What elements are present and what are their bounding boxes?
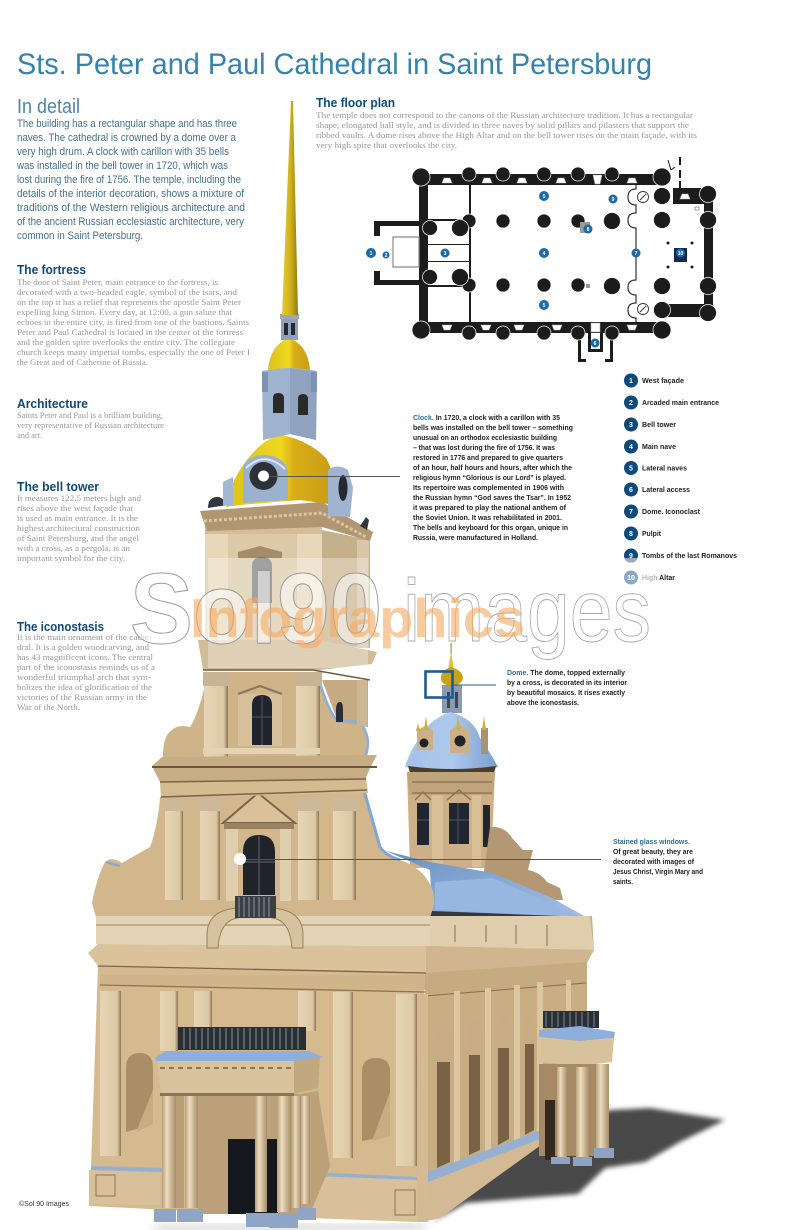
plan numbers: 4 [543,251,546,257]
watermark: Infographics [190,587,525,649]
text block: architecture: and art. [17,430,42,440]
title: Sts. Peter and Paul Cathedral in Saint Petersburg [17,48,652,81]
callout: clock: – that was lost during the fire of 1756. It was [413,443,555,452]
watermark haze over the tower [208,558,368,668]
text block: the bell tower: highest architectural construction [17,523,141,533]
text block: in detail: The building has a rectangular shape and has three [17,118,237,130]
text block: the floor plan: The temple does not correspond to the canons of the Russian architecture tradition. It has a rectangular [316,110,693,120]
callout: clock [413,413,573,542]
mid tier [152,672,377,798]
text block: the fortress: expelling king Simon. Every day, at 12:00, a gun salute that [17,307,233,317]
text block: the iconostasis: wonderful triumphal arch that sym- [17,672,151,682]
front lower wall [89,966,425,1222]
callout: stained glass windows [613,837,703,886]
side wall [423,916,594,1222]
callout: clock: restored in 1776 and prepared to give quarters [413,453,563,462]
callout: clock: religious hymn “Glorious is our Lord” is played. [413,473,566,482]
text block: architecture [17,397,164,440]
legend: Lateral access [642,485,690,494]
text block: in detail: traditions of the Western religious architecture and [17,202,245,214]
plan numbers: 2 [385,253,388,259]
text block: in detail: details of the interior decoration, shows a mixture of [17,188,244,200]
text block: the fortress: on the top it has a relief that represents the apostle Saint Peter [17,297,241,307]
plan numbers [366,191,685,348]
legend: Main nave [642,442,676,451]
eagles [208,489,369,530]
callout: dome: by a cross, is decorated in its interior [507,678,627,687]
side wall pilasters and windows [417,980,571,1222]
text block: the bell tower: important symbol for the city. [17,553,125,563]
callout: stained glass windows: Jesus Christ, Virgin Mary and [613,867,703,876]
text block: the fortress: and the golden spire overlooks the entire city. The collegiate [17,337,235,347]
watermark: images [403,561,651,660]
text block: the bell tower: is used as main entrance. It is the [17,513,138,523]
text block: the floor plan: ribbed vaults. A dome rises above the High Altar and on the bell tower rises on the main façade, with its [316,130,698,140]
callout: clock: Clock. In 1720, a clock with a carillon with 35 [413,413,560,422]
legend: 3 [629,422,633,429]
plan numbers: 9 [612,197,615,203]
text block: the iconostasis [17,620,155,712]
callout: stained glass windows: decorated with images of [613,857,694,866]
text block: in detail: common in Saint Petersburg. [17,230,143,242]
plan numbers: 6 [594,341,597,347]
lower tier volutes [92,790,434,917]
callout: stained glass windows: Of great beauty, they are [613,847,693,856]
front pilasters and niches [100,991,417,1166]
text block: architecture: very representative of Russian architecture [17,420,164,430]
text block: the fortress: Peter and Paul Cathedral is located in the center of the fortress [17,327,244,337]
text block: the fortress: the Great and of Catherine of Russia. [17,357,148,367]
callout: dome: above the iconostasis. [507,698,579,707]
nave roof [386,851,586,917]
callout: dome: by beautiful mosaics. It rises exactly [507,688,626,697]
legend: 4 [629,444,633,451]
callout: clock: The bells and keyboard for this organ, unique in [413,523,568,532]
text block: the floor plan: very high spire that overlooks the city. [316,140,457,150]
text block: the floor plan: The floor plan [316,96,395,110]
text block: the bell tower: rises above the west façade that [17,503,134,513]
callout: clock: Its repertoire was complemented in 1906 with [413,483,564,492]
legend: 7 [629,509,633,516]
legend [624,374,737,584]
callout: clock: the Soviet Union. It was rehabilitated in 2001. [413,513,562,522]
lower tier pilasters [164,797,357,900]
callout: clock: unusual on an orthodox ecclesiastic building [413,433,557,442]
callout: dome: Dome. The dome, topped externally [507,668,626,677]
plan numbers: 8 [587,227,590,233]
tombs and pulpit [638,192,648,202]
watermark: Sol90 [130,553,382,665]
copyright: ©Sol 90 Images [19,1200,69,1208]
cathedral illustration [88,101,615,1228]
text block: the iconostasis: part of the iconostasis reminds us of a [17,662,155,672]
text block: the fortress: The door of Saint Peter, main entrance to the fortress, is [17,277,219,287]
text block: the bell tower: The bell tower [17,480,99,494]
upper tier [198,502,377,680]
text block: the fortress: church keeps many imperial tombs, especially the one of Peter I [17,347,250,357]
legend: 8 [629,531,633,538]
text block: the iconostasis: has 43 magnificent icons. The central [17,652,154,662]
legend: Lateral naves [642,464,687,472]
text block: in detail: lost during the fire of 1756. The temple, including the [17,174,241,186]
text block: the fortress: echoes in the entire city, is fired from one of the bastions. Saints [17,317,250,327]
ground shadow [150,1108,725,1230]
text block: the bell tower: with a cross, as a pergola, is an [17,543,131,553]
plan numbers: 5 [543,303,546,309]
lantern drum [262,314,317,440]
legend: Arcaded main entrance [642,398,719,407]
leader lines [234,470,601,865]
text block: the iconostasis: victories of the Russian army in the [17,692,147,702]
plan numbers: 1 [370,251,373,257]
text block: in detail: was installed in the bell tower in 1720, which was [16,160,228,172]
plinth [89,1166,417,1222]
main dome [223,435,353,517]
plan numbers: 10 [678,251,683,257]
legend: 5 [629,466,633,472]
legend: Dome. Iconoclast [642,507,701,516]
legend: 6 [629,487,633,494]
plan numbers: 5 [543,194,546,200]
text block: the fortress [17,263,250,367]
text block: the iconostasis: bolizes the idea of glorification of the [17,682,152,692]
text block: in detail: In detail [17,96,80,118]
side portico [539,1011,615,1166]
small dome tower [405,643,498,868]
front portico [154,1027,330,1228]
callout: stained glass windows: Stained glass windows. [613,837,690,846]
callout: dome [507,668,627,707]
callout: clock: Russia, were manufactured in Holland. [413,533,538,542]
callout: clock: of an hour, half hours and hours, after which the [413,463,572,472]
callout: stained glass windows: saints. [613,877,633,886]
text block: in detail: very high drum. A clock with carillon with 35 bells [17,146,229,158]
text block: the fortress: decorated with a two-headed eagle, symbol of the tsars, and [17,287,238,297]
text block: the iconostasis: War of the North. [17,702,80,712]
legend: Tombs of the last Romanovs [642,551,737,560]
text block: architecture: Saints Peter and Paul is a brilliant building, [17,410,163,420]
callout: clock: the Russian hymn “God saves the Tsar”. In 1952 [413,493,571,502]
legend: West façade [642,376,684,385]
text block: the bell tower [17,480,142,563]
text block: the bell tower: of Saint Petersburg, and the angel [17,533,140,543]
text block: in detail: of the ancient Russian ecclesiastic architecture, very [17,216,245,228]
floor plan diagram [366,157,716,362]
cornice band [88,896,430,992]
windows [442,175,690,332]
golden spire [282,101,298,315]
text block: the iconostasis: dral. It is a golden woodcarving, and [17,642,150,652]
text block: architecture: Architecture [17,397,88,411]
text block: in detail [16,96,245,242]
text block: the bell tower: It measures 122.5 meters high and [17,493,142,503]
text block: the floor plan: shape, elongated hall style, and is divided in three naves by solid pillars and pilasters that support the [316,120,689,130]
text block: in detail: naves. The cathedral is crowned by a dome over a [17,132,236,144]
text block: the iconostasis: It is the main ornament of the cathe- [17,632,152,642]
text block: the fortress: The fortress [17,263,86,277]
legend: 1 [629,378,633,385]
back volute [480,827,563,900]
plan numbers: 3 [444,251,447,257]
legend: 9 [629,553,633,560]
plan numbers: 7 [635,251,638,257]
legend: 2 [629,400,633,407]
watermark [130,553,651,665]
pediment window [223,793,295,901]
legend: 10 [627,575,635,582]
legend: Pulpit [642,529,661,538]
callout: clock: bells was installed on the bell tower – something [413,423,573,432]
callout: clock: it was prepared to play the national anthem of [413,503,567,512]
legend: Bell tower [642,420,676,429]
legend: High Altar [642,573,675,582]
columns [412,167,716,340]
text block: the iconostasis: The iconostasis [17,620,104,634]
text block: the floor plan [316,96,698,150]
